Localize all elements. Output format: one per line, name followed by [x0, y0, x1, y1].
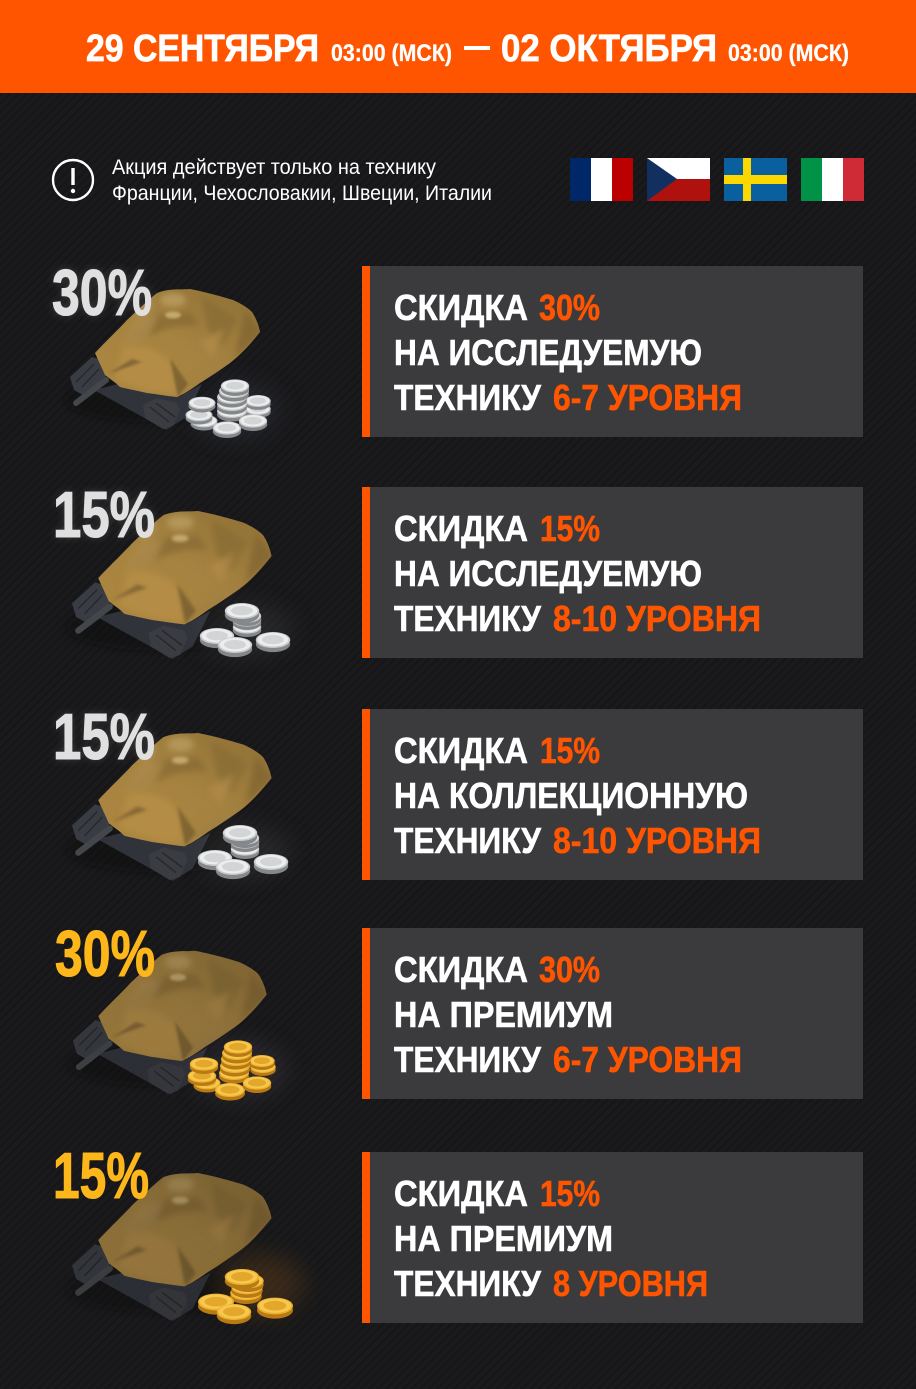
panel: row 2: СКИДКА [394, 508, 528, 549]
panel: row 5: ТЕХНИКУ [394, 1263, 542, 1304]
row 5 illustration: tank with gold coins [67, 1173, 304, 1324]
panel: row 4: 30% [539, 949, 600, 990]
notice text: Акция действует только на технику [112, 156, 436, 179]
panel: row 2: 15% [540, 508, 600, 549]
row 3 illustration: tank with silver coins [67, 733, 291, 881]
panel: row 3: 15% [540, 730, 600, 771]
header banner: 02 ОКТЯБРЯ [501, 28, 717, 70]
icon: flag of Czechoslovakia [647, 158, 710, 201]
panel: row 1: 6-7 УРОВНЯ [553, 377, 742, 418]
header banner: 03:00 (МСК) [728, 40, 849, 67]
panel: row 5: СКИДКА [394, 1173, 528, 1214]
panel: row 4: ТЕХНИКУ [394, 1039, 542, 1080]
row 2 illustration: tank with silver coins [67, 511, 293, 659]
panel: row 4: 6-7 УРОВНЯ [553, 1039, 742, 1080]
header banner: 29 СЕНТЯБРЯ [86, 28, 319, 70]
panel: row 3: ТЕХНИКУ [394, 820, 542, 861]
panel: row 5: НА ПРЕМИУМ [394, 1218, 613, 1259]
panel: row 1: НА ИССЛЕДУЕМУЮ [394, 332, 702, 373]
panel: row 2: 8-10 УРОВНЯ [553, 598, 761, 639]
panel: row 1: ТЕХНИКУ [394, 377, 542, 418]
row 5 percent: 15% [53, 1139, 149, 1212]
panel: row 1: 30% [539, 287, 600, 328]
panel: row 2: ТЕХНИКУ [394, 598, 542, 639]
panel: row 5: 15% [540, 1173, 600, 1214]
row 4 illustration: tank with gold coins [68, 951, 286, 1100]
panel: row 5: 8 УРОВНЯ [553, 1263, 708, 1304]
panel: row 4 [362, 928, 863, 1099]
panel: row 1: СКИДКА [394, 287, 528, 328]
row 1 illustration: tank with silver coins [65, 289, 280, 438]
panel: row 5 [362, 1152, 863, 1323]
icon: flag of France [570, 158, 633, 201]
panel: row 4: СКИДКА [394, 949, 528, 990]
panel: row 3: НА КОЛЛЕКЦИОННУЮ [394, 775, 748, 816]
panel: row 4: НА ПРЕМИУМ [394, 994, 613, 1035]
panel: row 1 [362, 266, 863, 437]
panel: row 2: НА ИССЛЕДУЕМУЮ [394, 553, 702, 594]
icon: flag of Sweden [724, 158, 787, 201]
notice text: Франции, Чехословакии, Швеции, Италии [112, 182, 492, 205]
row 1 percent: 30% [52, 256, 152, 329]
notice text [112, 156, 492, 205]
panel: row 2 [362, 487, 863, 658]
panel: row 3: 8-10 УРОВНЯ [553, 820, 761, 861]
icon: exclamation [53, 160, 93, 200]
header banner: 03:00 (МСК) [331, 40, 452, 67]
icon: flag of Italy [801, 158, 864, 201]
panel: row 3: СКИДКА [394, 730, 528, 771]
panel: row 3 [362, 709, 863, 880]
row 2 percent: 15% [53, 478, 155, 551]
row 3 percent: 15% [53, 700, 155, 773]
header banner [0, 0, 916, 93]
row 4 percent: 30% [55, 917, 155, 990]
